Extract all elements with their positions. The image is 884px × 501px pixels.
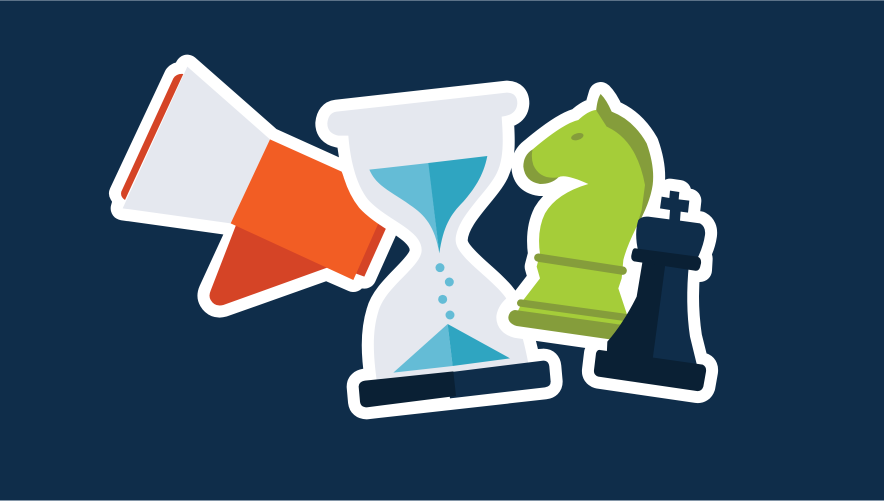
hourglass base xyxy=(359,361,551,407)
falling sand dots xyxy=(435,263,454,319)
muzzle shadow xyxy=(523,149,558,184)
king body dark side xyxy=(607,257,666,362)
lower sand xyxy=(393,324,510,373)
knight collar xyxy=(538,258,623,271)
mane shadow xyxy=(596,94,653,227)
king body light side xyxy=(650,260,697,367)
upper sand xyxy=(369,156,487,253)
king cross and crown xyxy=(636,191,705,260)
king collar xyxy=(631,248,701,271)
icon: megaphone xyxy=(121,67,386,306)
icon: chess knight xyxy=(508,94,653,339)
king outline xyxy=(594,191,706,391)
icon: hourglass xyxy=(327,93,551,407)
knight body xyxy=(517,110,645,325)
icon: chess king xyxy=(594,191,706,391)
king base xyxy=(594,350,706,391)
knight base bands xyxy=(508,303,627,339)
knight eye xyxy=(570,132,584,142)
